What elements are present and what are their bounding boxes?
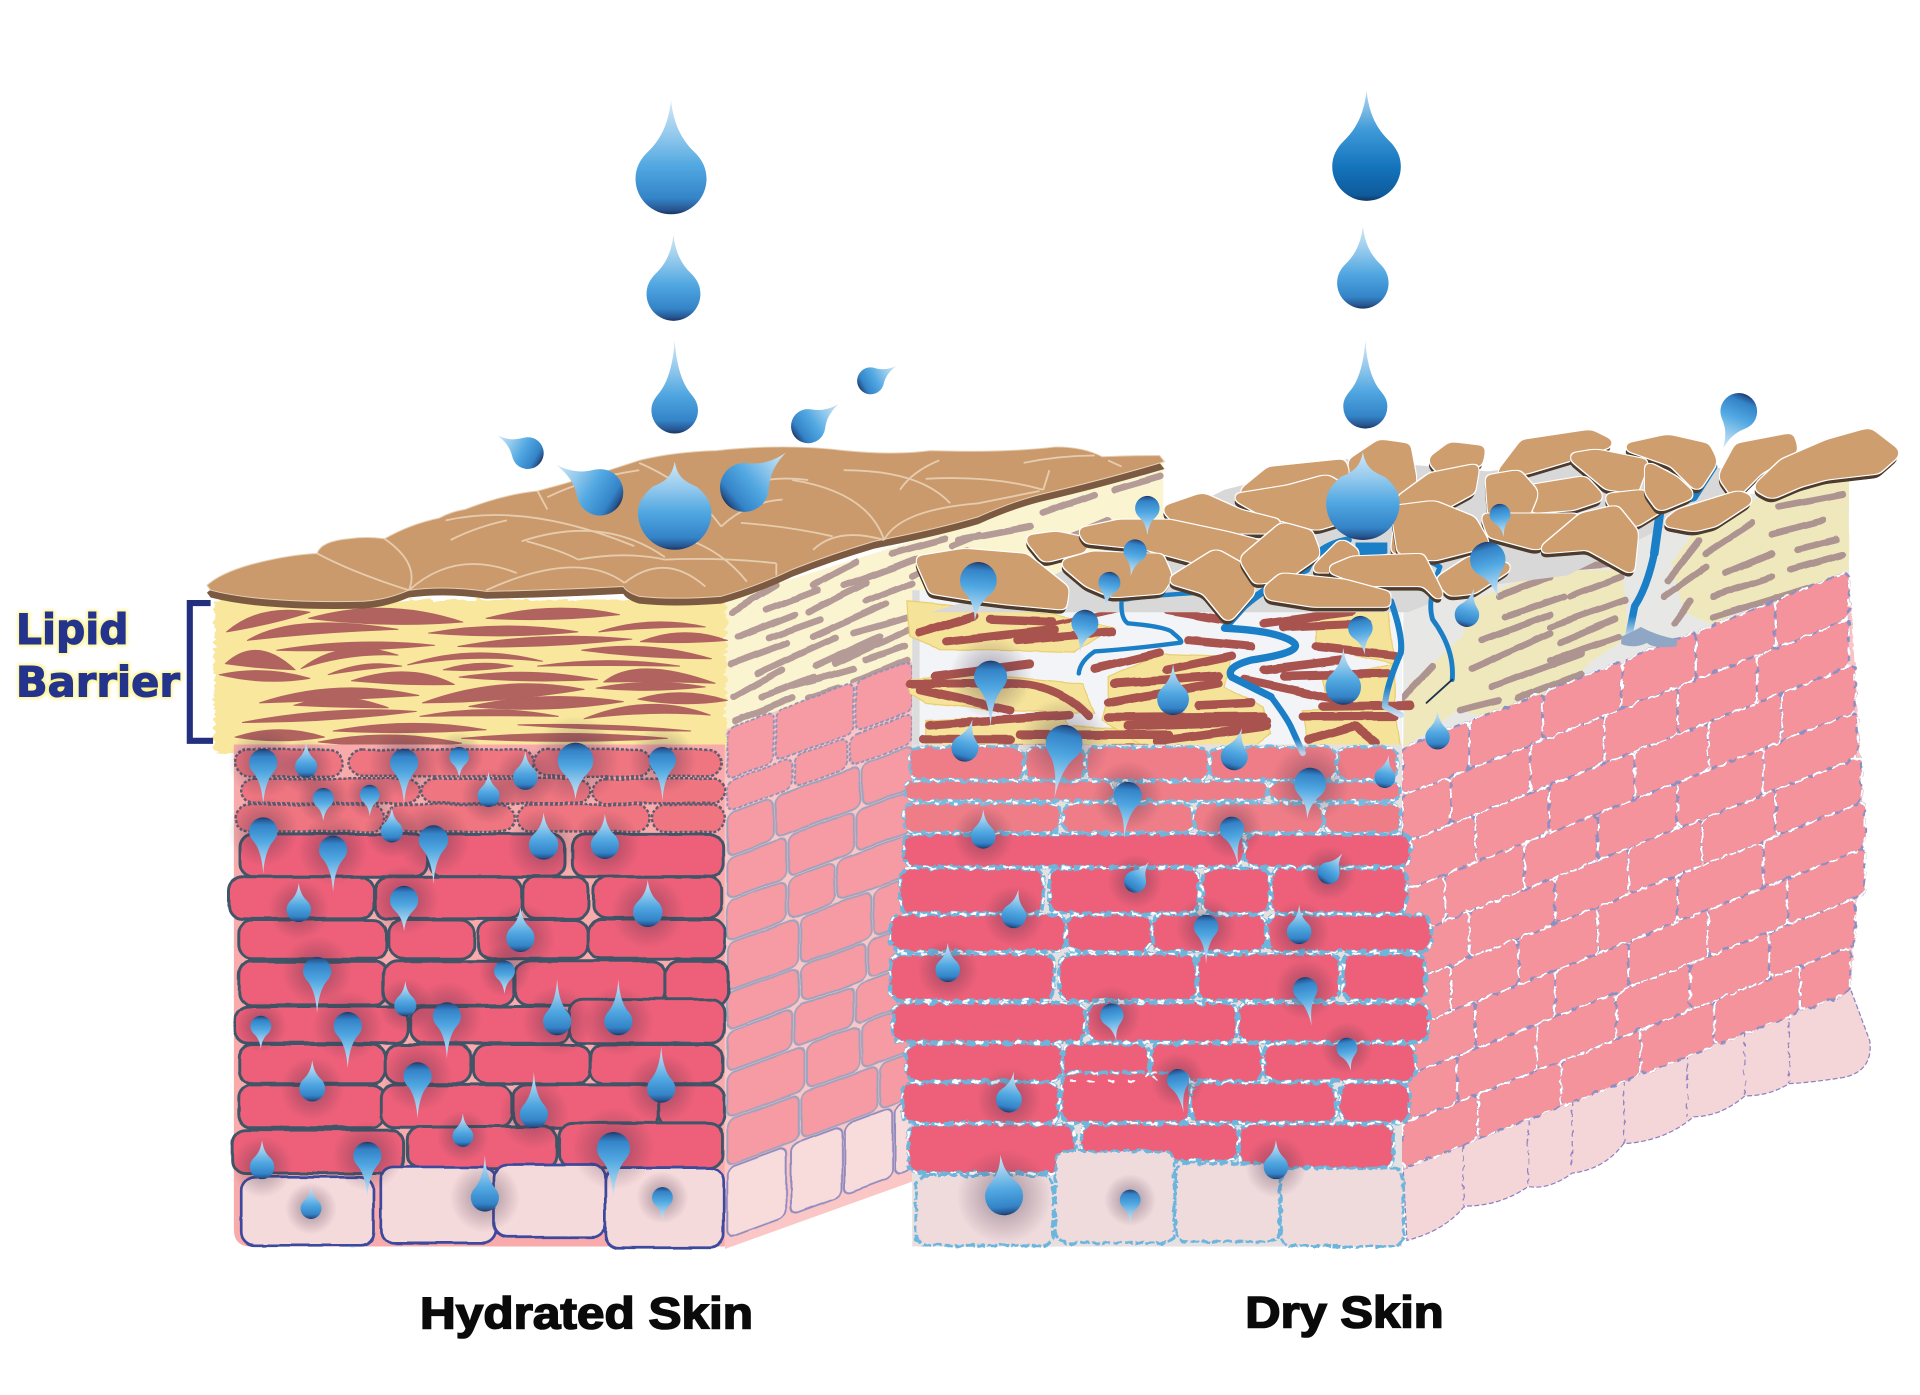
hydrated: upper pale cells with dashed outlines: [235, 749, 725, 831]
water drops: escaping through dry skin: [917, 496, 1515, 1248]
label: Lipid Barrier: Barrier: [16, 658, 180, 707]
label: Dry Skin: Dry Skin: [1245, 1288, 1444, 1337]
dry: grey shadow beneath flakes: [931, 453, 1739, 612]
water drops: falling above hydrated skin: [489, 101, 903, 550]
panel: dry skin block: [890, 432, 1896, 1247]
hydrated front: cell layers: [229, 744, 729, 1248]
water drops: falling above dry skin: [1326, 91, 1763, 540]
dry: basal cells: [916, 1151, 1403, 1247]
hydrated: basal cells: [241, 1164, 724, 1248]
label: Lipid Barrier: [16, 605, 180, 707]
panel: hydrated skin block: [207, 447, 1164, 1249]
dry side: grey and yellow lipid face: [1401, 480, 1849, 751]
label: Hydrated Skin: Hydrated Skin: [420, 1290, 753, 1339]
hydrated side: pale lipid face: [725, 463, 1163, 735]
dry: detached brown flakes: [920, 432, 1896, 617]
bracket: lipid barrier extent: [190, 603, 213, 741]
hydrated front: lipid strands: [219, 608, 727, 746]
dry side: pink cracked cell layer: [1402, 565, 1865, 1169]
hydrated: brown stratum corneum top surface: [207, 447, 1164, 609]
dry side: pale basal cells: [1403, 988, 1870, 1240]
dry front: yellow lipid fragments: [907, 601, 1401, 753]
hydrated: lower red cells: [229, 834, 729, 1173]
dry front: cracked cell layers: [890, 744, 1431, 1247]
dry: blue water-loss cracks: [1079, 467, 1713, 753]
water drops: inside hydrated cells: [228, 716, 696, 1235]
hydrated side: pink cell layer: [725, 660, 912, 1249]
dry front: fractured lipid strands: [910, 606, 1411, 748]
dry front: backing and lipid chunks: [907, 590, 1411, 753]
label: Lipid Barrier: Lipid: [16, 605, 129, 654]
hydrated front: lipid barrier layer: [214, 600, 727, 752]
